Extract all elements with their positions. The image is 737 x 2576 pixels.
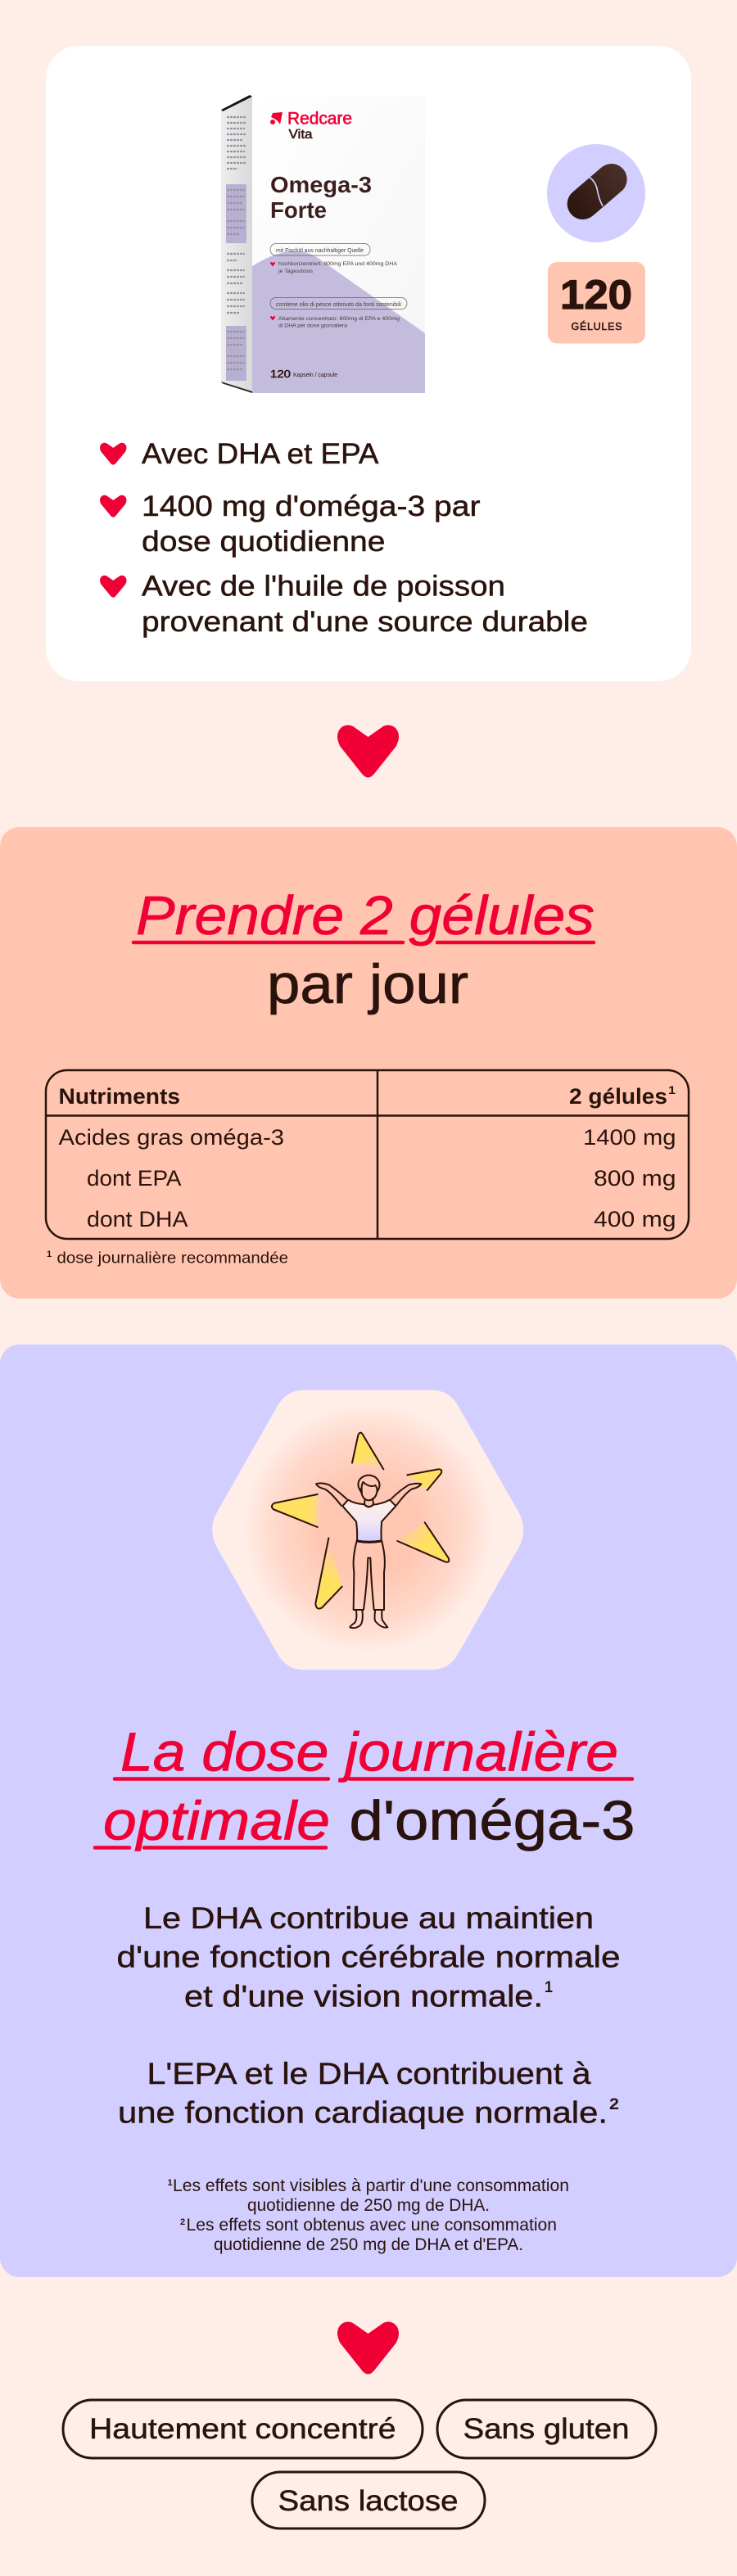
box claims: hochkonzentriert: 800mg EPA und 400mg DHA: [278, 261, 398, 267]
box claims: contiene olio di pesce ottenuto da fonti sostenibili: [276, 302, 401, 308]
box claims: je Tagesdosis: [278, 269, 314, 274]
table footnote: dose journalière recommandée: [57, 1250, 288, 1268]
icon: heart arrow 2: [337, 2322, 399, 2375]
brand logo: Redcare: [287, 110, 352, 128]
table header: [59, 1083, 676, 1109]
panel: product card: [46, 46, 691, 681]
text: footnotes: 2: [180, 2217, 185, 2227]
heading: La dose journalière optimale d'oméga-3: d'oméga-3: [349, 1790, 635, 1852]
heading: Prendre 2 gélules par jour: [133, 885, 595, 1015]
box capsule count: [270, 368, 337, 380]
chip: Sans lactose: Sans lactose: [278, 2485, 459, 2517]
text: DHA claim: d'une fonction cérébrale normale: [116, 1939, 621, 1973]
panel: dosage: [0, 827, 737, 1299]
benefit: 1400 mg: [100, 490, 481, 558]
row: DHA: 400 mg: [594, 1207, 676, 1232]
benefit: 1400 mg: dose quotidienne: [142, 526, 385, 558]
row: oméga-3: 1400 mg: [583, 1125, 676, 1150]
text: EPA claim: L'EPA et le DHA contribuent à: [147, 2056, 591, 2090]
table header: 2 gélules: [569, 1084, 667, 1109]
box capsule count: Kapseln / capsule: [293, 373, 337, 378]
product name: [270, 172, 372, 223]
table footnote: 1: [47, 1250, 52, 1259]
row: DHA: dont DHA: [87, 1207, 188, 1232]
table header: 1: [668, 1083, 676, 1096]
row: EPA: dont EPA: [87, 1166, 182, 1191]
benefit: Avec DHA et EPA: Avec DHA et EPA: [142, 438, 379, 470]
icon: heart arrow 1: [337, 725, 399, 778]
product name: Omega-3: [270, 172, 372, 197]
badge: 120 gélules: 120: [560, 272, 632, 318]
chip: Sans lactose: [252, 2472, 485, 2529]
box claims: Altamente concentrato: 800mg di EPA e 400mg: [278, 316, 400, 322]
chip: Sans gluten: [437, 2400, 656, 2458]
benefit: 1400 mg: 1400 mg d'oméga-3 par: [142, 490, 481, 522]
text: footnotes: quotidienne de 250 mg de DHA.: [247, 2196, 490, 2215]
table header: Nutriments: [59, 1084, 180, 1109]
text: footnotes: 1: [167, 2178, 173, 2188]
heading: La dose journalière optimale d'oméga-3: [95, 1721, 635, 1852]
box claims: mit Fischöl aus nachhaltiger Quelle: [276, 248, 364, 254]
benefit: huile de poisson: provenant d'une source durable: [142, 606, 588, 638]
badge: 120 gélules: [548, 262, 645, 344]
row: DHA: [87, 1207, 676, 1232]
text: DHA claim: et d'une vision normale.: [184, 1978, 543, 2013]
benefit: huile de poisson: Avec de l'huile de poisson: [142, 570, 505, 603]
nutrition table: [46, 1070, 689, 1239]
box capsule count: 120: [270, 368, 291, 380]
text: DHA claim: Le DHA contribue au maintien: [143, 1900, 594, 1935]
brand logo: Vita: [288, 128, 313, 142]
panel: optimal dose: [0, 1344, 737, 2277]
row: oméga-3: Acides gras oméga-3: [59, 1125, 284, 1150]
heading: Prendre 2 gélules par jour: par jour: [267, 953, 468, 1015]
row: oméga-3: [59, 1125, 676, 1150]
text: footnotes: Les effets sont visibles à partir d'une consommation: [173, 2176, 569, 2195]
chip: Hautement concentré: [63, 2400, 423, 2458]
brand logo: [270, 110, 352, 142]
text: EPA claim: [118, 2056, 619, 2129]
text: EPA claim: une fonction cardiaque normale.: [118, 2095, 608, 2129]
heading: La dose journalière optimale d'oméga-3: La dose journalière: [120, 1721, 618, 1783]
text: DHA claim: [116, 1900, 621, 2013]
badge: 120 gélules: GÉLULES: [572, 320, 622, 332]
chip: Sans gluten: Sans gluten: [463, 2413, 629, 2445]
heading: La dose journalière optimale d'oméga-3: optimale: [103, 1790, 330, 1852]
chip: Hautement concentré: Hautement concentré: [89, 2413, 396, 2445]
box claims: di DHA per dose giornaliera: [278, 323, 347, 329]
row: EPA: [87, 1166, 676, 1191]
product box: [221, 95, 425, 393]
text: footnotes: quotidienne de 250 mg de DHA et d'EPA.: [214, 2235, 523, 2254]
text: EPA claim: 2: [609, 2096, 619, 2113]
product name: Forte: [270, 197, 327, 223]
icon: capsule in circle: [547, 144, 645, 242]
text: footnotes: Les effets sont obtenus avec une consommation: [187, 2216, 557, 2235]
heading: Prendre 2 gélules par jour: Prendre 2 gélules: [136, 885, 595, 947]
benefit: huile de poisson: [100, 570, 588, 638]
row: EPA: 800 mg: [594, 1166, 676, 1191]
illustration: person with star in hexagon: [212, 1390, 523, 1670]
box claims: [270, 244, 407, 329]
text: DHA claim: 1: [545, 1979, 553, 1996]
text: footnotes: [167, 2176, 569, 2254]
